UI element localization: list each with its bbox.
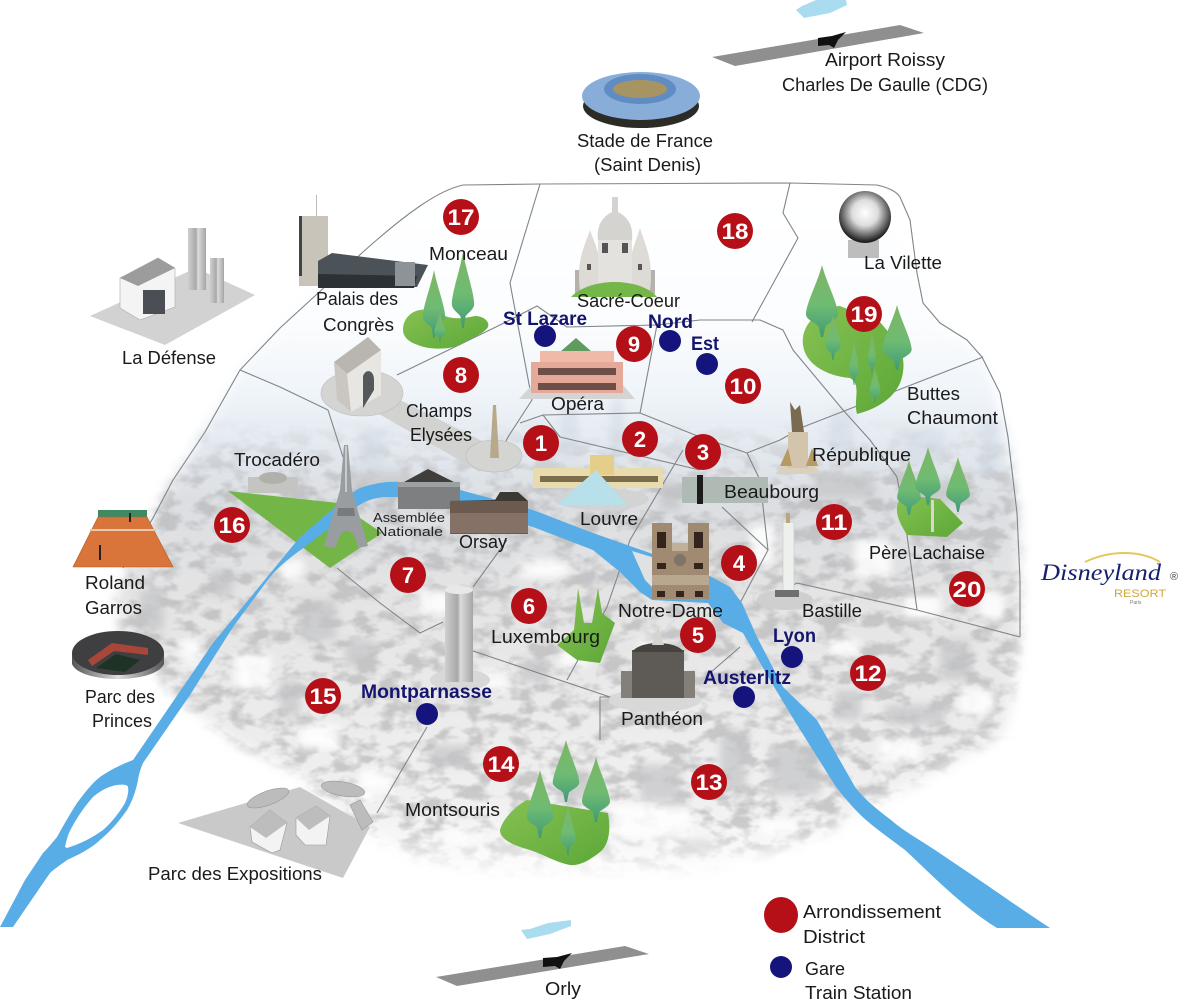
marker 14: 14 <box>488 752 515 777</box>
landmark: Roland Garros: Garros <box>85 598 142 618</box>
label: Louvre: Louvre <box>580 509 638 529</box>
park: Buttes Chaumont: Chaumont <box>907 408 998 428</box>
landmark: Stade de France <box>577 72 713 175</box>
marker 3: 3 <box>697 440 709 465</box>
landmark: Bastille <box>757 513 862 621</box>
label: Buttes Chaumont: Buttes <box>907 384 960 404</box>
landmark: Tour Montparnasse <box>430 586 490 691</box>
landmark: Roland Garros <box>73 510 173 618</box>
label: Trocadéro: Trocadéro <box>234 450 320 470</box>
landmark: Parc des Princes: Princes <box>92 711 152 731</box>
park: Père Lachaise <box>869 447 985 563</box>
landmark: Opéra <box>519 338 635 414</box>
label: Assemblée Nationale: Assemblée <box>373 510 445 525</box>
station: St Lazare <box>503 309 587 347</box>
marker 9: 9 <box>628 332 640 357</box>
label: Champs Elysées: Champs <box>406 401 472 421</box>
marker 19 <box>846 296 882 332</box>
legend: arrondissement: Arrondissement <box>803 902 941 922</box>
marker 1: 1 <box>535 431 547 456</box>
marker 18: 18 <box>722 219 748 244</box>
station: Montparnasse <box>361 682 492 725</box>
marker 17: 17 <box>448 205 474 230</box>
marker 2: 2 <box>634 427 646 452</box>
icon: plane <box>796 0 847 18</box>
label: La Vilette: La Vilette <box>864 253 942 273</box>
park: Luxembourg <box>491 588 615 663</box>
label: Parc des Princes: Parc des <box>85 687 155 707</box>
marker 3 <box>685 434 721 470</box>
landmark: République <box>775 402 911 474</box>
island: Allée des Cygnes <box>65 785 128 848</box>
label: Airport Roissy: Airport Roissy <box>825 50 945 70</box>
marker 17 <box>443 199 479 235</box>
label: République: République <box>812 445 911 465</box>
marker 10 <box>725 368 761 404</box>
label: La Défense: La Défense <box>122 348 216 368</box>
label: Opéra: Opéra <box>551 394 605 414</box>
landmark: Parc des Expositions <box>148 778 373 884</box>
label: Panthéon: Panthéon <box>621 709 703 729</box>
legend: train station <box>770 956 912 1000</box>
marker 20: 20 <box>952 577 982 602</box>
marker 7 <box>390 557 426 593</box>
station: Nord: Nord <box>648 312 693 333</box>
station: Montparnasse: Montparnasse <box>361 682 492 703</box>
icon: plane shadow <box>818 32 846 48</box>
park: Monceau <box>403 244 508 349</box>
marker 2 <box>622 421 658 457</box>
marker 12: 12 <box>854 661 882 686</box>
logo: Disneyland Paris <box>1040 553 1178 606</box>
legend: arrondissement <box>764 897 941 947</box>
station: Austerlitz: Austerlitz <box>703 668 791 689</box>
landmark: La Défense <box>90 228 255 368</box>
label: Parc des Expositions: Parc des Expositions <box>148 864 322 884</box>
landmark: Champs Elysées and Arc de Triomphe: Elysées <box>410 425 472 445</box>
marker 14 <box>483 746 519 782</box>
marker 5 <box>680 617 716 653</box>
station: Est: Est <box>691 334 720 355</box>
logo: Disneyland Paris: ® <box>1170 571 1178 583</box>
label: Orsay: Orsay <box>459 532 507 552</box>
marker 5: 5 <box>692 623 704 648</box>
marker 1 <box>523 425 559 461</box>
landmark: Beaubourg <box>682 475 819 504</box>
landmark: Palais de Chaillot, Trocadéro <box>234 450 320 493</box>
marker 13 <box>691 764 727 800</box>
landmark: Panthéon <box>609 626 703 729</box>
airport: Orly <box>436 920 649 999</box>
background: faded city photo <box>111 349 1026 872</box>
label: Notre-Dame: Notre-Dame <box>618 601 723 621</box>
landmark: Sacré-Coeur <box>571 197 680 311</box>
marker 4 <box>721 545 757 581</box>
marker 13: 13 <box>696 770 722 795</box>
icon: plane <box>521 920 571 939</box>
icon: plane shadow <box>543 953 572 969</box>
marker 18 <box>717 213 753 249</box>
marker 16: 16 <box>218 513 246 538</box>
marker 8: 8 <box>455 363 467 388</box>
island: Cité <box>632 551 655 590</box>
landmark: Palais des Congrès: Congrès <box>323 315 394 335</box>
label: Sacré-Coeur: Sacré-Coeur <box>577 291 680 311</box>
label: Assemblée Nationale <box>373 510 445 539</box>
marker 7: 7 <box>402 563 414 588</box>
arrondissement markers <box>214 199 985 800</box>
marker 20 <box>949 571 985 607</box>
station: St Lazare: St Lazare <box>503 309 587 330</box>
landmark: Orsay <box>450 492 528 552</box>
landmark: La Vilette <box>839 191 942 273</box>
marker 16 <box>214 507 250 543</box>
marker 15: 15 <box>310 684 336 709</box>
station: Lyon <box>773 626 816 668</box>
label: Montsouris: Montsouris <box>405 800 500 820</box>
marker 11 <box>816 504 852 540</box>
label: Orly: Orly <box>545 979 581 999</box>
marker 6: 6 <box>523 594 535 619</box>
train stations <box>361 309 816 725</box>
label: Bastille: Bastille <box>802 601 862 621</box>
park: Buttes Chaumont <box>803 265 998 428</box>
park: Montsouris <box>405 740 610 865</box>
park: Trocadéro gardens <box>228 491 382 568</box>
logo: Disneyland Paris: Paris <box>1130 600 1142 606</box>
landmark: Palais des Congrès <box>299 195 428 335</box>
logo: Disneyland Paris: RESORT <box>1114 588 1166 600</box>
landmark: Stade de France: (Saint Denis) <box>594 155 701 175</box>
marker 9 <box>616 326 652 362</box>
station: Austerlitz <box>703 668 791 708</box>
legend: arrondissement: District <box>803 927 865 947</box>
label: Assemblée Nationale: Nationale <box>376 524 443 539</box>
label: Palais des Congrès: Palais des <box>316 289 398 309</box>
marker 8 <box>443 357 479 393</box>
label: Monceau: Monceau <box>429 244 508 264</box>
landmark: Louvre <box>533 455 663 529</box>
airport: Roissy CDG: Charles De Gaulle (CDG) <box>782 75 988 95</box>
marker 6 <box>511 588 547 624</box>
landmark: Assemblée Nationale <box>398 469 460 509</box>
label: Luxembourg: Luxembourg <box>491 627 600 647</box>
station: Nord <box>648 312 693 352</box>
label: Beaubourg: Beaubourg <box>724 482 819 502</box>
district boundaries <box>123 183 1020 813</box>
marker 4: 4 <box>733 551 746 576</box>
marker 10: 10 <box>730 374 756 399</box>
landmark: Champs Elysées and Arc de Triomphe <box>321 337 522 472</box>
marker 15 <box>305 678 341 714</box>
river: Seine <box>0 482 1050 928</box>
landmark: Notre-Dame <box>618 523 723 621</box>
station: Est <box>691 334 720 375</box>
marker 12 <box>850 655 886 691</box>
legend: train station: Gare <box>805 959 845 979</box>
marker 11: 11 <box>820 510 848 535</box>
marker 19: 19 <box>850 302 878 327</box>
landmark: Parc des Princes <box>72 631 164 731</box>
airport: Roissy CDG <box>712 0 988 95</box>
legend <box>764 897 941 1000</box>
label: Roland Garros: Roland <box>85 573 145 593</box>
station: Lyon: Lyon <box>773 626 816 647</box>
label: Père Lachaise: Père Lachaise <box>869 543 985 563</box>
label: Stade de France: Stade de France <box>577 131 713 151</box>
landmark: Eiffel Tower <box>324 445 368 548</box>
logo: Disneyland Paris: Disneyland <box>1040 560 1162 585</box>
